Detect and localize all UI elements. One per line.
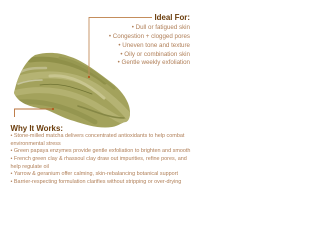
- heading: ideal for: Ideal For:: [154, 13, 190, 22]
- illustration: matcha clay swatch: [14, 52, 130, 128]
- list: ideal for: • Gentle weekly exfoliation: [118, 59, 190, 66]
- list: why it works: • Barrier-respecting formulation clarifies without stripping or over-drying: [10, 179, 181, 185]
- connector: swatch to why it works: [14, 108, 54, 117]
- connector: ideal for to swatch: [88, 17, 152, 78]
- list: ideal for: • Dull or fatigued skin: [132, 24, 190, 31]
- list: why it works: • French green clay & rhassoul clay draw out impurities, refine pores, and: [10, 156, 187, 162]
- list: ideal for: • Oily or combination skin: [120, 50, 190, 58]
- list: why it works: help regulate oil: [10, 164, 49, 170]
- list: ideal for: [109, 24, 190, 66]
- list: ideal for: • Uneven tone and texture: [118, 42, 190, 49]
- list: why it works: • Green papaya enzymes provide gentle exfoliation to brighten and smooth: [10, 148, 190, 154]
- heading: why it works: Why It Works:: [10, 124, 63, 132]
- list: why it works: environmental stress: [10, 140, 61, 146]
- list: why it works: [10, 132, 190, 185]
- list: ideal for: • Congestion + clogged pores: [109, 33, 190, 40]
- list: why it works: • Yarrow & geranium offer calming, skin-rebalancing botanical support: [10, 171, 178, 177]
- list: why it works: • Stone-milled matcha delivers concentrated antioxidants to help combat: [10, 132, 184, 138]
